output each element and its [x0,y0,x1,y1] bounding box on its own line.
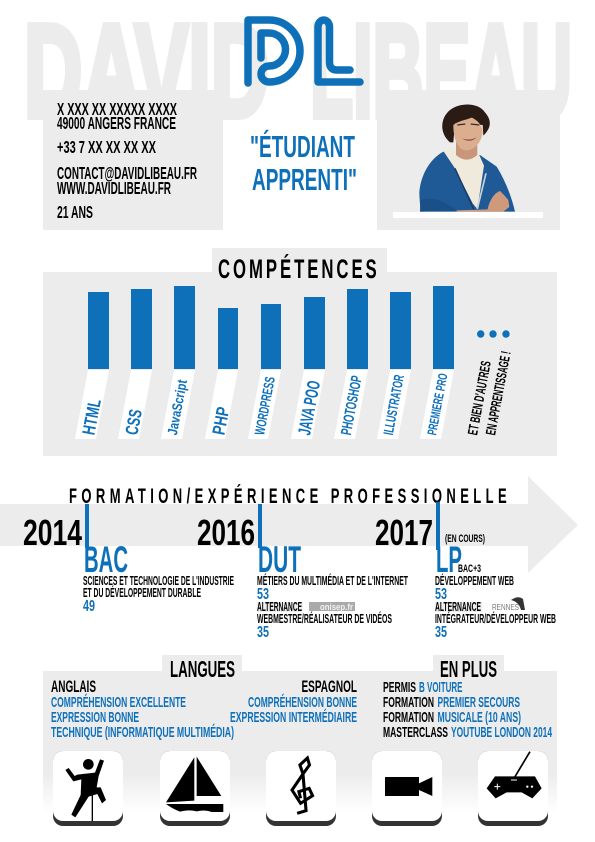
address: CONTACT@DAVIDLIBEAU.FR [57,163,197,183]
languages: English: EXPRESSION BONNE [51,709,139,726]
timeline arrow [0,476,578,573]
bar: WordPress: WORDPRESS [251,375,278,436]
extras list: MASTERCLASS [383,724,448,741]
extras list: FORMATION [383,709,434,726]
timeline entry: 2014 BAC: ET DU DÉVELOPPEMENT DURABLE [83,585,201,600]
icon: three dots [477,330,510,338]
bar: JavaScript: JavaScript [164,378,190,436]
bar: HTML [75,292,109,439]
tagline: "ÉTUDIANT [250,129,355,164]
languages: Spanish: ESPAGNOL [302,677,357,696]
timeline entry: 2016 DUT: 2016 [197,512,255,553]
bar: CSS: CSS [122,408,146,436]
bar: Photoshop: PHOTOSHOP [338,374,366,436]
extras list [383,679,552,741]
heading: langues: LANGUES [170,656,235,682]
languages: English: COMPRÉHENSION EXCELLENTE [51,694,186,711]
note: others being learned: EN APPRENTISSAGE ! [482,350,514,436]
languages: Spanish: EXPRESSION INTERMÉDIAIRE [230,709,357,726]
timeline entry: 2016 DUT: 35 [257,624,269,641]
timeline entry: 2017 LP [375,502,556,641]
timeline entry: 2017 LP: (EN COURS) [445,533,485,545]
logo: onisep: onisep.fr [320,602,353,612]
heading: en plus: EN PLUS [440,656,497,682]
address: +33 7 XX XX XX XX [57,137,156,157]
logo: université de Rennes [492,597,525,612]
bar: PHP [205,308,238,439]
extras list: MUSICALE (10 ANS) [438,709,521,726]
bar: Premiere Pro [420,286,454,439]
note: others being learned: ET BIEN D'AUTRES [464,360,494,436]
timeline entry: 2017 LP: 53 [435,586,447,603]
bar: Illustrator [377,292,411,439]
icon card: climbing [53,751,123,826]
timeline entry: 2016 DUT: MÉTIERS DU MULTIMÉDIA ET DE L'INTERNET [257,573,408,588]
address: WWW.DAVIDLIBEAU.FR [57,178,171,198]
extras list: B VOITURE [419,679,462,696]
note: others being learned [464,350,514,436]
timeline entry: 2017 LP: BAC+3 [458,563,481,575]
address: X XXX XX XXXXX XXXX [57,99,177,119]
address [57,99,197,222]
bar: Illustrator: ILLUSTRATOR [380,373,407,436]
languages: English: ANGLAIS [51,677,96,696]
heading: compétences: COMPÉTENCES [218,254,377,284]
bar: Photoshop [334,289,368,439]
timeline entry: 2016 DUT: WEBMESTRE/RÉALISATEUR DE VIDÉOS [257,611,392,626]
icon card: sailboat [160,751,230,826]
bar: HTML: HTML [79,397,105,436]
languages: English: TECHNIQUE (INFORMATIQUE MULTIMÉDIA) [51,724,234,741]
bar: Java POO: JAVA POO [294,379,324,437]
heading: formation: FORMATION/EXPÉRIENCE PROFESSIONELLE [69,483,507,508]
panel: langues and en plus [43,655,557,813]
extras list: PREMIER SECOURS [438,694,520,711]
bar: WordPress [248,304,281,439]
languages: Spanish: COMPRÉHENSION BONNE [248,694,357,711]
tagline: APPRENTI" [252,162,357,197]
logo: DL monogram [248,20,360,83]
extras list: FORMATION [383,694,434,711]
icon card: treble clef [266,751,336,826]
panel: photo [377,90,560,230]
bar: PHP: PHP [209,405,233,436]
timeline entry: 2016 DUT [197,504,408,641]
timeline entry: 2016 DUT: ALTERNANCE [257,600,302,614]
languages: Spanish [230,677,357,726]
timeline entry: 2016 DUT: 53 [257,586,269,603]
address: 49000 ANGERS FRANCE [57,113,176,133]
extras list: PERMIS [383,679,416,696]
languages: English [51,677,234,741]
panel: compétences [43,248,557,456]
timeline entry: 2017 LP: DÉVELOPPEMENT WEB [435,573,514,588]
timeline entry: 2017 LP: 2017 [375,512,433,553]
icon card: video camera [372,751,442,826]
bar: CSS [118,289,152,439]
timeline entry: 2017 LP: ALTERNANCE [435,600,481,614]
bar: Java POO [291,297,325,439]
bar: JavaScript [161,286,195,439]
timeline entry: 2014 BAC: BAC [84,539,128,580]
portrait illustration [419,105,515,212]
timeline entry: 2014 BAC: SCIENCES ET TECHNOLOGIE DE L'INDUSTRIE [83,574,234,588]
timeline entry: 2017 LP: LP [436,539,462,580]
timeline entry: 2016 DUT: DUT [258,539,301,580]
tagline [250,129,357,197]
logo: université de Rennes: RENNES [492,603,519,612]
address: 21 ANS [57,202,93,222]
timeline entry: 2014 BAC [23,504,234,615]
background name: David Libeau: DAVID [24,0,269,144]
timeline entry: 2014 BAC: 49 [83,598,95,615]
background name: David Libeau [27,22,570,120]
bar: Premiere Pro: PREMIERE PRO [424,372,451,436]
panel: contact details [43,90,223,230]
timeline entry: 2017 LP: 35 [435,624,447,641]
icon card: game controller [478,751,548,826]
timeline entry: 2014 BAC: 2014 [23,512,82,553]
